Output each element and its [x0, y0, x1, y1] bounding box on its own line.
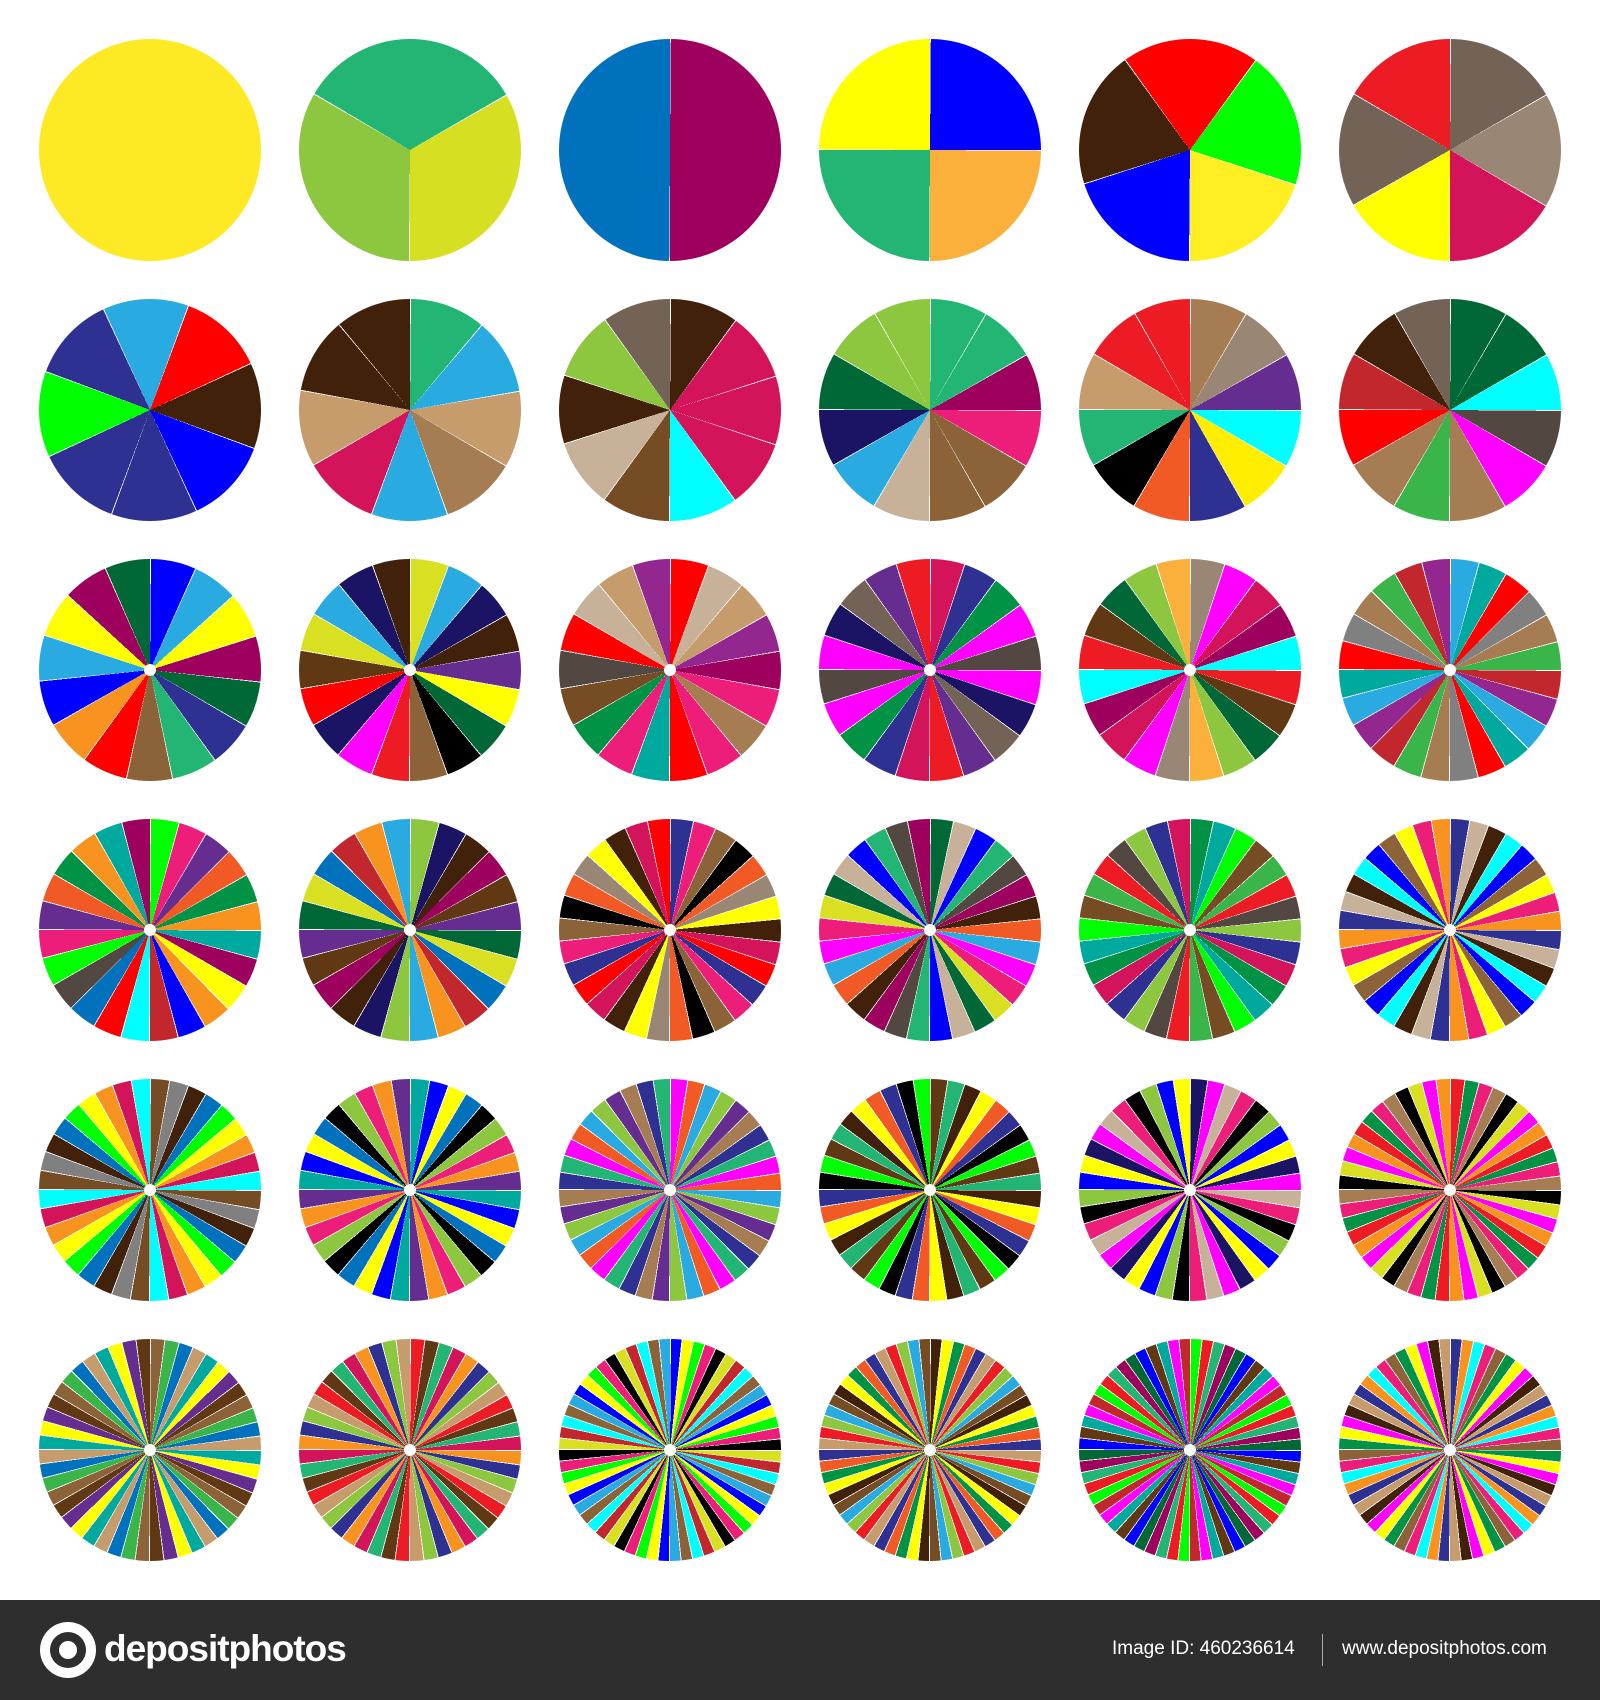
pie 25: [39, 1079, 261, 1301]
pie 22: [819, 819, 1041, 1041]
pie 14: [299, 559, 521, 781]
pie 13: [39, 559, 261, 781]
pie 24: [1339, 819, 1561, 1041]
pie 35: [1079, 1339, 1301, 1561]
brand name: depositphotos: [104, 1628, 346, 1669]
pie 33: [559, 1339, 781, 1561]
pie 6: [1339, 39, 1561, 261]
pie 31: [39, 1339, 261, 1561]
pie 18: [1339, 559, 1561, 781]
footer bar: [0, 1600, 1600, 1700]
pie 29: [1079, 1079, 1301, 1301]
pie 20: [299, 819, 521, 1041]
pie 36: [1339, 1339, 1561, 1561]
pie 19: [39, 819, 261, 1041]
pie 5: [1079, 39, 1301, 261]
pie 27: [559, 1079, 781, 1301]
pie 17: [1079, 559, 1301, 781]
pie 1: [39, 39, 261, 261]
pie 11: [1079, 299, 1301, 521]
pie 12: [1339, 299, 1561, 521]
pie 10: [819, 299, 1041, 521]
pie 23: [1079, 819, 1301, 1041]
url: www.depositphotos.com: [1342, 1638, 1547, 1659]
pie 28: [819, 1079, 1041, 1301]
pie 3: [559, 39, 781, 261]
pie 30: [1339, 1079, 1561, 1301]
icon: depositphotos logo: [40, 1622, 96, 1678]
pie 26: [299, 1079, 521, 1301]
pie 8: [299, 299, 521, 521]
pie 4: [819, 39, 1041, 261]
pie 21: [559, 819, 781, 1041]
pie 16: [819, 559, 1041, 781]
pie 15: [559, 559, 781, 781]
pie 9: [559, 299, 781, 521]
pie 34: [819, 1339, 1041, 1561]
pie 7: [39, 299, 261, 521]
image id: Image ID: 460236614: [1112, 1638, 1295, 1659]
pie 2: [299, 39, 521, 261]
pie 32: [299, 1339, 521, 1561]
